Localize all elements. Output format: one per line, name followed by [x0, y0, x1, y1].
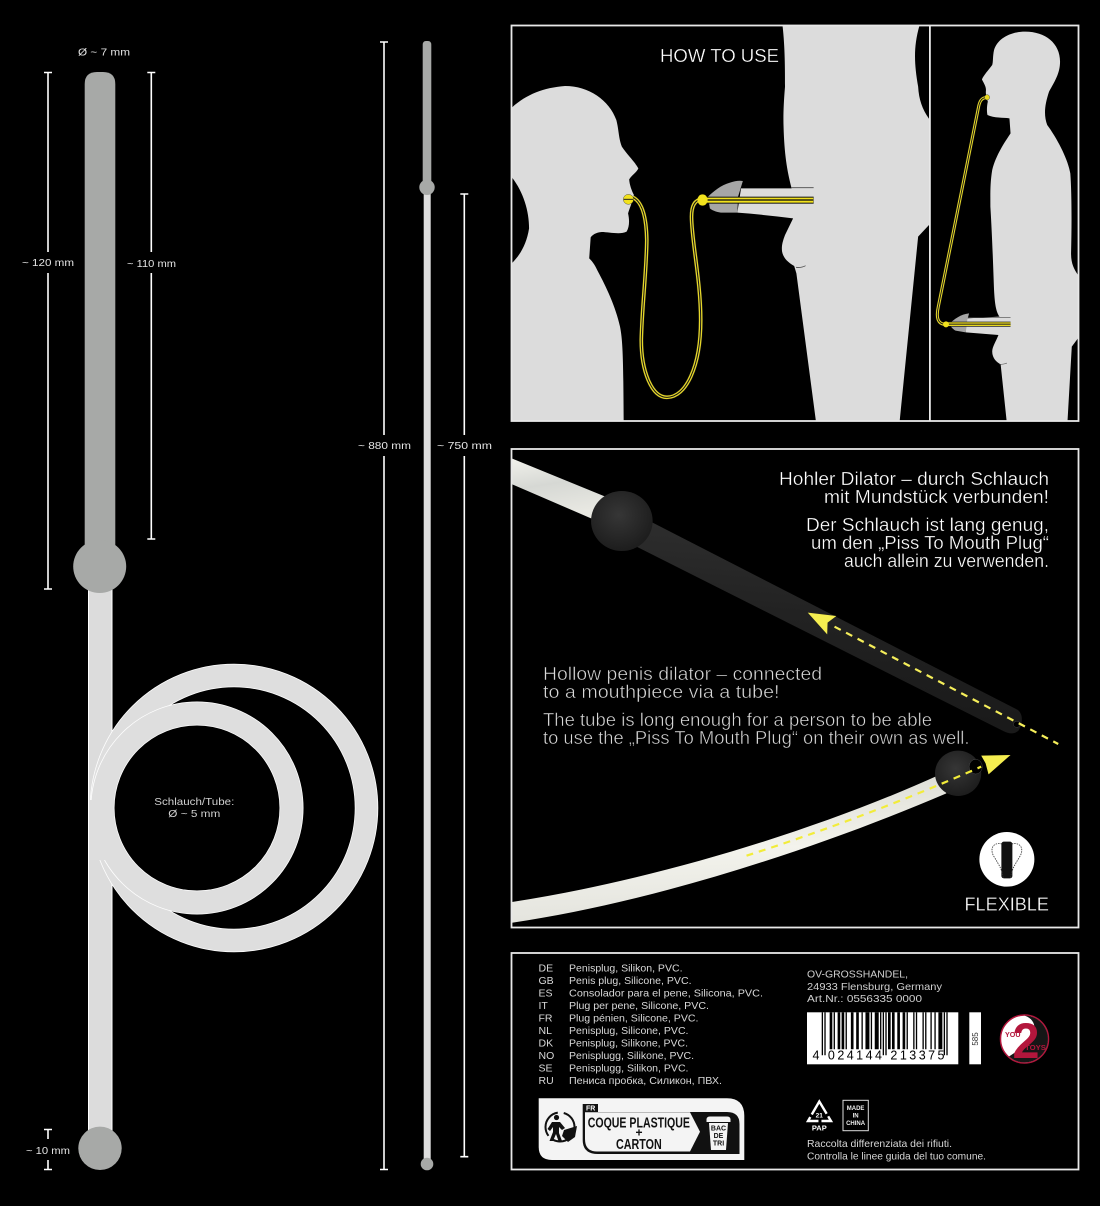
- icon: recycling PAP 21: [808, 1102, 831, 1132]
- text block: German: Hohler Dilator – durch Schlauch: [779, 469, 1049, 489]
- full length end ball: [421, 1158, 433, 1170]
- label: rod diameter: Ø ~ 7 mm: [78, 46, 130, 58]
- penis shading line: [792, 188, 814, 267]
- silhouette: standing person: [737, 25, 930, 423]
- panel divider: [929, 26, 931, 421]
- material list by language: [538, 963, 763, 1087]
- dimension: 110 mm: [127, 72, 176, 539]
- penis shading line: [967, 318, 1011, 364]
- material list by language: NL: [538, 1025, 552, 1037]
- photo: mouthpiece ball: [935, 751, 981, 796]
- dimension: 120 mm: ~ 120 mm: [22, 257, 74, 269]
- arrow: lower dashed flow line: [747, 755, 1011, 856]
- panel frame: [512, 449, 1078, 928]
- material list by language: Penisplug, Silicone, PVC.: [569, 1025, 688, 1037]
- dimension: 750 mm: ~ 750 mm: [437, 440, 492, 452]
- dilator rod: [85, 72, 115, 560]
- icon: sorting bin: BAC: [711, 1126, 726, 1132]
- sorting instruction arrow: +: [635, 1126, 643, 1140]
- distributor address: [807, 968, 943, 1005]
- tube: coiled hose and vertical section: [88, 590, 366, 1135]
- product diagram: dilator with coiled tube: [22, 46, 366, 1170]
- icon: sorting bin: [706, 1116, 730, 1150]
- small mouthpiece: [985, 95, 990, 100]
- text block: English: The tube is long enough for a person to be able: [543, 710, 932, 730]
- label: tube diameter: Schlauch/Tube:: [154, 796, 234, 808]
- logo: you2toys: TOYS: [1025, 1043, 1046, 1052]
- sorting note: Raccolta differenziata dei rifiuti.: [807, 1138, 952, 1150]
- icon: made in china: CHINA: [846, 1121, 866, 1127]
- small plug bar: [946, 322, 1011, 327]
- material list by language: Penisplugg, Silikon, PVC.: [569, 1062, 688, 1074]
- small glans: [949, 313, 969, 332]
- material list by language: Plug pénien, Silicone, PVC.: [569, 1012, 698, 1024]
- text block: English: to a mouthpiece via a tube!: [543, 682, 780, 702]
- material list by language: IT: [538, 1000, 548, 1012]
- material list by language: NO: [538, 1050, 554, 1062]
- text block: German: mit Mundstück verbunden!: [824, 487, 1049, 507]
- icon: made in china: [843, 1100, 868, 1131]
- sorting instruction arrow: FR: [586, 1106, 595, 1112]
- material list by language: Penisplug, Silikone, PVC.: [569, 1038, 688, 1050]
- sorting note: [807, 1138, 986, 1162]
- logo: you2toys: 2: [1012, 1013, 1040, 1069]
- panel: product information: [512, 953, 1078, 1170]
- small plug ball: [943, 321, 949, 327]
- material list by language: FR: [538, 1012, 553, 1024]
- batch code: 585: [971, 1032, 980, 1046]
- text block: German: Der Schlauch ist lang genug,: [806, 515, 1049, 535]
- icon: recycling PAP 21: 21: [816, 1112, 823, 1120]
- photo: mouthpiece opening: [969, 759, 982, 774]
- recycling label: [539, 1098, 744, 1160]
- silhouettes and tube, right scene: [937, 32, 1079, 423]
- photo: dilator ball: [591, 491, 653, 551]
- material list by language: Penisplug, Silikon, PVC.: [569, 963, 682, 975]
- full length tube: [424, 192, 431, 1160]
- dimension: 10 mm: [26, 1130, 70, 1170]
- silhouette: kneeling person: [510, 86, 638, 423]
- glans: [708, 181, 743, 213]
- material list by language: Plug per pene, Silicone, PVC.: [569, 1000, 709, 1012]
- panel: how to use: [510, 25, 1079, 423]
- material list by language: RU: [538, 1075, 554, 1087]
- dimension: 880 mm: [358, 42, 411, 1170]
- material list by language: SE: [538, 1062, 553, 1074]
- material list by language: Пениса пробка, Силикон, ПВХ.: [569, 1075, 722, 1087]
- sorting instruction arrow: COQUE PLASTIQUE: [588, 1115, 690, 1131]
- barcode: [807, 1012, 958, 1064]
- plug bar: [701, 197, 814, 204]
- heading: how to use: HOW TO USE: [660, 45, 779, 66]
- icon: triman recycling person: [546, 1112, 577, 1142]
- text block: English: [543, 664, 970, 748]
- silhouettes and tube, left scene: [510, 25, 930, 423]
- logo: you2toys: YOU: [1005, 1030, 1020, 1039]
- stopper ball: [73, 540, 126, 593]
- material list by language: ES: [538, 988, 553, 1000]
- sorting instruction arrow: [583, 1104, 740, 1154]
- material list by language: Penisplugg, Silikone, PVC.: [569, 1050, 694, 1062]
- icon: sorting bin: TRI: [713, 1140, 724, 1148]
- text block: German: [779, 469, 1049, 571]
- text block: German: auch allein zu verwenden.: [844, 551, 1049, 571]
- icon: recycling PAP 21: PAP: [812, 1124, 827, 1132]
- photo: rod opening: [1013, 721, 1020, 727]
- tube: yellow line to own mouth: [937, 97, 987, 324]
- full length diagram: [358, 41, 492, 1170]
- dimension: 110 mm: ~ 110 mm: [127, 258, 176, 270]
- distributor address: 24933 Flensburg, Germany: [807, 981, 943, 993]
- arrow: upper dashed flow line: [808, 613, 1058, 744]
- label: tube diameter: [154, 796, 234, 820]
- material list by language: DE: [538, 963, 553, 975]
- panel frame: [512, 26, 1078, 421]
- text block: German: um den „Piss To Mouth Plug“: [811, 533, 1049, 553]
- material list by language: DK: [538, 1038, 553, 1050]
- logo: you2toys: [1000, 1013, 1048, 1069]
- panel frame: [512, 953, 1078, 1170]
- product photo: [510, 458, 1058, 923]
- icon: sorting bin: DE: [714, 1133, 724, 1140]
- text block: English: Hollow penis dilator – connected: [543, 664, 822, 684]
- dimension: 10 mm: ~ 10 mm: [26, 1145, 70, 1157]
- text block: English: to use the „Piss To Mouth Plug“ on their own as well.: [543, 728, 970, 748]
- photo: clear tube top: [510, 458, 605, 519]
- panel: product detail: [510, 449, 1078, 928]
- dimension: 120 mm: [22, 72, 74, 589]
- material list by language: GB: [538, 975, 554, 987]
- sorting note: Controlla le linee guida del tuo comune.: [807, 1150, 986, 1162]
- mouthpiece: [623, 194, 634, 204]
- distributor address: Art.Nr.: 0556335 0000: [807, 993, 922, 1005]
- icon: made in china: MADE: [847, 1106, 864, 1112]
- label: tube diameter: Ø ~ 5 mm: [168, 808, 221, 820]
- distributor address: OV-GROSSHANDEL,: [807, 968, 908, 980]
- photo: clear tube bottom: [510, 775, 946, 923]
- material list by language: Penis plug, Silicone, PVC.: [569, 975, 692, 987]
- icon: made in china: IN: [853, 1114, 859, 1120]
- dimension: 880 mm: ~ 880 mm: [358, 440, 411, 452]
- sorting instruction arrow: CARTON: [616, 1137, 662, 1153]
- barcode: 4 024144 213375: [812, 1048, 945, 1062]
- label: flexible: FLEXIBLE: [964, 894, 1049, 914]
- dimension: 750 mm: [437, 194, 492, 1157]
- tube: yellow line to mouth: [633, 197, 701, 397]
- plug ball: [697, 194, 708, 206]
- photo: black dilator rod: [637, 520, 1022, 733]
- silhouette: self-use person: [966, 32, 1079, 423]
- full length rod: [423, 41, 431, 185]
- end ball: [78, 1127, 122, 1170]
- icon: flexible: [979, 832, 1034, 887]
- material list by language: Consolador para el pene, Silicona, PVC.: [569, 988, 763, 1000]
- batch code: [969, 1012, 981, 1064]
- full length stopper ball: [419, 180, 435, 195]
